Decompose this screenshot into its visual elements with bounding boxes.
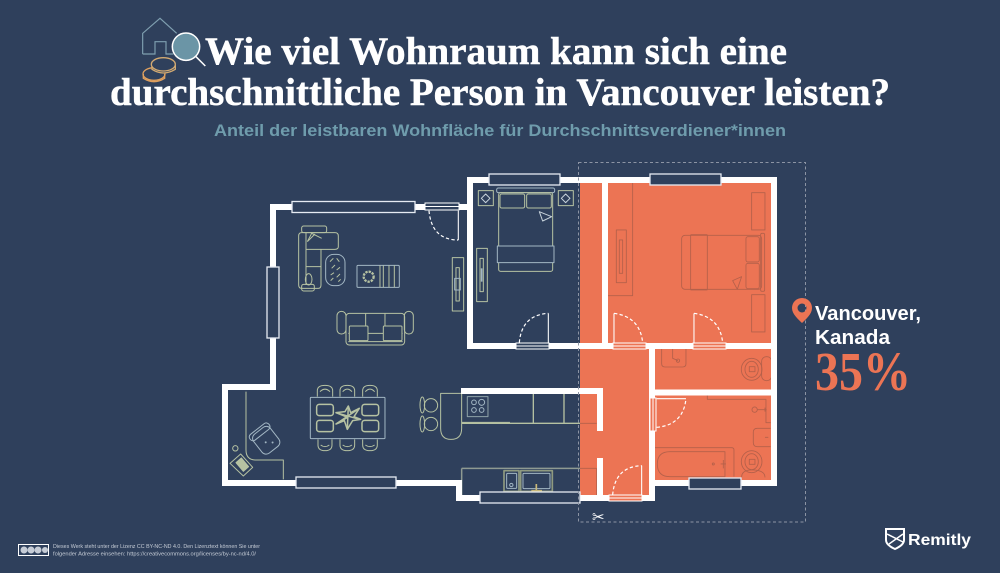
license text: Dieses Werk steht unter der Lizenz CC BY-NC-ND 4.0. Den Lizenztext können Sie unter bbox=[53, 544, 260, 550]
license text bbox=[53, 544, 260, 558]
door swing bbox=[429, 211, 458, 240]
sofa bbox=[337, 311, 413, 345]
tv console bbox=[452, 258, 464, 311]
door frame: entrance bbox=[609, 495, 642, 501]
windows and door frames bbox=[267, 174, 741, 503]
icon: map pin bbox=[792, 298, 812, 323]
percentage: 35% bbox=[815, 341, 911, 402]
nightstands bbox=[478, 191, 573, 206]
title: durchschnittliche Person in Vancouver leisten? bbox=[110, 71, 890, 114]
kitchen and bathroom fittings bbox=[462, 348, 772, 495]
door frame: bedroom bbox=[516, 343, 549, 349]
door frame: living room bbox=[425, 203, 459, 210]
lower bathroom fixtures bbox=[655, 395, 771, 477]
bedroom furniture bbox=[477, 183, 765, 343]
tv console bbox=[477, 248, 487, 302]
upper counter bbox=[462, 393, 597, 423]
stove bbox=[467, 397, 488, 417]
walls bbox=[225, 180, 774, 498]
license text: folgender Adresse einsehen: https://creativecommons.org/licenses/by-nc-nd/4.0/ bbox=[53, 552, 256, 558]
orange closet and tv bbox=[608, 183, 633, 296]
door frame: hall bbox=[693, 343, 726, 349]
license badge bbox=[18, 544, 49, 556]
armchair bbox=[248, 422, 283, 457]
dining and study furniture bbox=[230, 385, 510, 479]
ottoman bbox=[326, 254, 345, 286]
icon: scissors: ✂ bbox=[592, 508, 605, 526]
door swing bbox=[519, 313, 548, 343]
window: living room left bbox=[267, 267, 279, 338]
panel: orange affordable area bbox=[580, 183, 771, 495]
upper bathroom fixtures bbox=[662, 348, 772, 381]
logo: Remitly bbox=[886, 529, 971, 549]
door swing to hall bbox=[613, 466, 642, 495]
laptop and cup bbox=[230, 446, 253, 476]
living room furniture bbox=[299, 211, 464, 345]
window: living room bottom bbox=[296, 477, 396, 488]
coffee table bbox=[357, 265, 399, 287]
lower counter bbox=[462, 468, 597, 495]
window: living room top bbox=[292, 202, 415, 212]
bed bbox=[497, 188, 555, 271]
window: bathroom bbox=[689, 478, 741, 489]
bar stools bbox=[420, 397, 438, 432]
icon: house, magnifier and coins bbox=[143, 18, 205, 82]
kitchen sink bbox=[504, 471, 552, 491]
window: bedroom top bbox=[489, 174, 560, 185]
logo: Remitly: Remitly bbox=[908, 532, 971, 549]
dashed cut line bbox=[578, 162, 806, 522]
bathroom door swing bbox=[657, 399, 686, 427]
dining table bbox=[310, 385, 385, 451]
door frame: main bedroom bbox=[613, 343, 646, 349]
window: kitchen bottom bbox=[480, 492, 580, 503]
title bbox=[110, 30, 890, 114]
corner sofa bbox=[299, 226, 338, 291]
kitchen island end bbox=[441, 393, 510, 439]
title: Wie viel Wohnraum kann sich eine bbox=[205, 30, 787, 73]
orange door swings bbox=[614, 313, 723, 343]
orange bed bbox=[682, 193, 765, 332]
city label: Kanada bbox=[815, 327, 891, 349]
callout: Vancouver 35% bbox=[792, 298, 921, 402]
window: main bedroom top bbox=[650, 174, 721, 185]
desk bbox=[246, 392, 283, 479]
subtitle: Anteil der leistbaren Wohnfläche für Durchschnittsverdiener*innen bbox=[214, 121, 786, 140]
city label: Vancouver, bbox=[815, 303, 921, 325]
door frame: bathroom bbox=[650, 398, 656, 431]
